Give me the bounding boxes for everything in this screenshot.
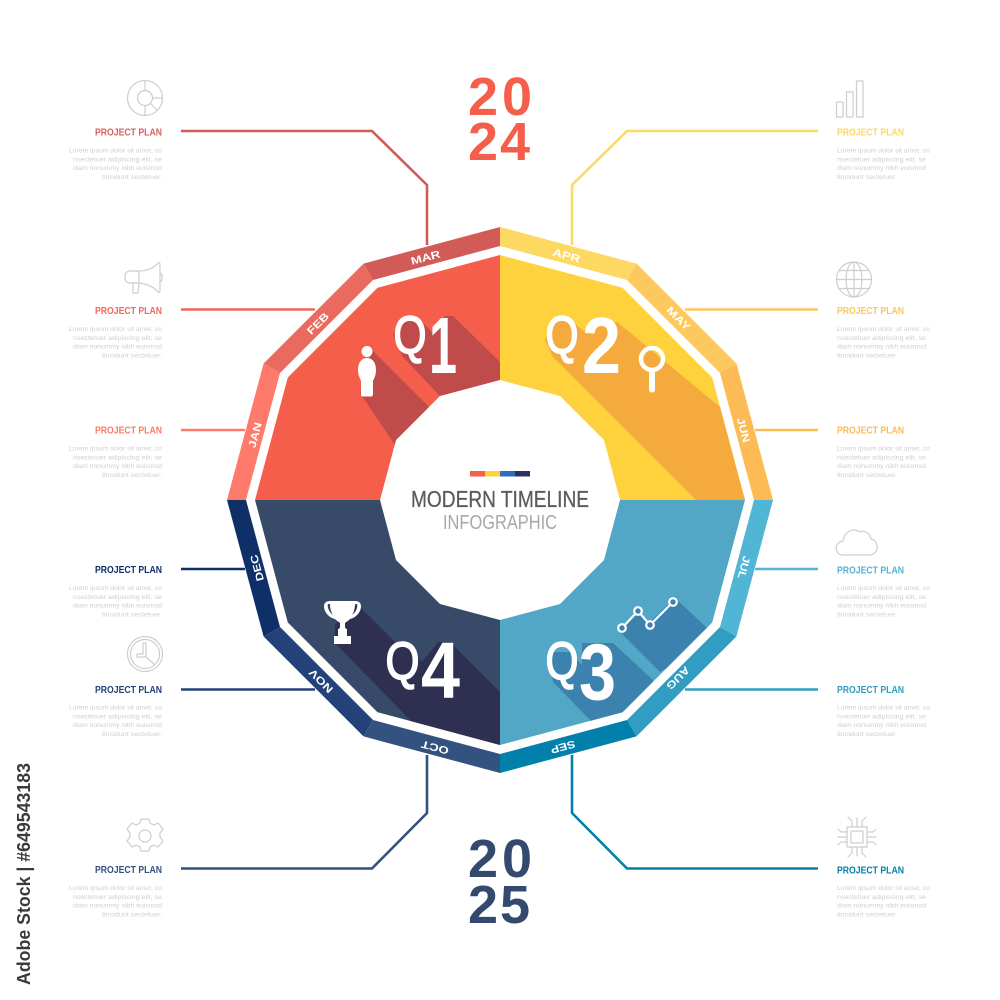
year 2024: 24 (468, 112, 530, 172)
label: December project plan: tincidunt sectetuer. (102, 612, 162, 618)
panel: Q3 (500, 500, 745, 745)
label: May project plan (837, 305, 930, 360)
connector lines (181, 131, 818, 868)
label: May project plan: PROJECT PLAN (837, 305, 904, 317)
label: August project plan: tincidunt sectetuer. (837, 731, 897, 738)
panel: Q4: Q (386, 632, 420, 691)
year 2025: 20 (468, 829, 532, 889)
month ring: JAN (246, 421, 265, 449)
year 2025: 25 (468, 875, 530, 935)
month ring: FEB (305, 310, 332, 337)
panel: Q2: Q (546, 306, 578, 365)
label: June project plan (837, 425, 930, 479)
label: June project plan: Lorem ipsum dolor sit amet, co (837, 446, 930, 452)
label: June project plan: tincidunt sectetuer. (837, 472, 897, 479)
label: January project plan: Lorem ipsum dolor sit amet, co (69, 446, 162, 452)
label: June project plan: nsectetuer adipiscing elit, se (837, 454, 926, 462)
label: March project plan: diam nonummy nibh euismod (73, 165, 162, 172)
label: April project plan: nsectetuer adipiscing elit, se (837, 156, 926, 164)
month ring: MAY (664, 304, 693, 333)
icon: megaphone (125, 263, 162, 293)
panel: Q1: 1 (429, 301, 457, 390)
label: April project plan: tincidunt sectetuer. (837, 174, 897, 181)
panel: Q3: 3 (579, 628, 616, 716)
center title (411, 471, 589, 534)
label: February project plan: PROJECT PLAN (95, 305, 162, 317)
label: July project plan: Lorem ipsum dolor sit amet, co (837, 585, 930, 592)
label: January project plan (69, 425, 162, 479)
panel: Q2 (500, 255, 760, 500)
icon: gear (127, 819, 163, 851)
label: May project plan: nsectetuer adipiscing elit, se (837, 335, 926, 342)
label: March project plan (69, 127, 162, 181)
icon: line chart (618, 598, 677, 632)
label: February project plan: Lorem ipsum dolor sit amet, co (69, 326, 162, 333)
icon: cloud (836, 530, 877, 555)
label: December project plan: Lorem ipsum dolor sit amet, co (69, 585, 162, 592)
label: December project plan: nsectetuer adipiscing elit, se (73, 594, 162, 601)
label: September project plan (837, 864, 930, 918)
label: March project plan: tincidunt sectetuer. (102, 174, 162, 181)
label: March project plan: Lorem ipsum dolor sit amet, co (69, 148, 162, 154)
label: July project plan: PROJECT PLAN (837, 564, 904, 576)
label: August project plan: nsectetuer adipiscing elit, se (837, 714, 926, 720)
label: October project plan: PROJECT PLAN (95, 864, 162, 876)
label: January project plan: nsectetuer adipiscing elit, se (73, 454, 162, 462)
label: September project plan: diam nonummy nibh euismod (837, 902, 926, 910)
label: April project plan: diam nonummy nibh euismod (837, 165, 926, 172)
panel: Q1 (255, 255, 505, 500)
label: October project plan (69, 864, 162, 918)
month ring (227, 227, 773, 773)
label: December project plan: diam nonummy nibh euismod (73, 602, 162, 610)
label: August project plan: PROJECT PLAN (837, 684, 904, 696)
label: July project plan: diam nonummy nibh euismod (837, 602, 926, 610)
label: October project plan: nsectetuer adipiscing elit, se (73, 894, 162, 901)
label: November project plan: Lorem ipsum dolor sit amet, co (69, 704, 162, 712)
icon: clock (128, 636, 162, 672)
label: August project plan (837, 684, 930, 738)
label: September project plan: PROJECT PLAN (837, 864, 904, 876)
label: August project plan: diam nonummy nibh euismod (837, 722, 926, 729)
label: September project plan: nsectetuer adipiscing elit, se (837, 894, 926, 901)
label: February project plan: diam nonummy nibh euismod (73, 344, 162, 350)
month ring: DEC (248, 553, 267, 582)
label: October project plan: Lorem ipsum dolor sit amet, co (69, 885, 162, 892)
label: October project plan: diam nonummy nibh euismod (73, 902, 162, 910)
month ring: JUL (734, 555, 752, 581)
label: August project plan: Lorem ipsum dolor sit amet, co (837, 704, 930, 712)
label: November project plan: nsectetuer adipiscing elit, se (73, 714, 162, 720)
year 2024: 20 (468, 67, 532, 127)
label: May project plan: Lorem ipsum dolor sit amet, co (837, 326, 930, 333)
label: November project plan: PROJECT PLAN (95, 684, 162, 696)
label: September project plan: Lorem ipsum dolor sit amet, co (837, 885, 930, 892)
label: February project plan: nsectetuer adipiscing elit, se (73, 335, 162, 342)
icon: microchip (838, 817, 876, 857)
label: February project plan: tincidunt sectetuer. (102, 352, 162, 360)
panel: Q4: 4 (421, 626, 460, 714)
label: January project plan: PROJECT PLAN (95, 425, 162, 437)
month ring: MAR (410, 248, 442, 268)
month ring: APR (551, 247, 582, 266)
label: April project plan (837, 127, 930, 181)
icon: donut chart (128, 80, 162, 116)
label: July project plan: nsectetuer adipiscing elit, se (837, 594, 926, 601)
label: April project plan: Lorem ipsum dolor sit amet, co (837, 148, 930, 154)
label: April project plan: PROJECT PLAN (837, 127, 904, 139)
label: December project plan (69, 564, 162, 618)
month ring: JUN (734, 417, 752, 444)
label: November project plan: tincidunt sectetuer. (102, 731, 162, 738)
month ring: AUG (663, 663, 692, 692)
month ring: NOV (307, 666, 336, 695)
year 2025 (468, 829, 532, 935)
year 2024 (468, 67, 532, 172)
panel: Q2: 2 (582, 301, 621, 390)
panel: Q3: Q (546, 632, 578, 691)
label: July project plan: tincidunt sectetuer. (837, 612, 897, 618)
credit line: Adobe Stock | #649543183 (14, 763, 34, 985)
label: February project plan (69, 305, 162, 360)
month ring: SEP (549, 737, 576, 755)
label: October project plan: tincidunt sectetuer. (102, 912, 162, 918)
label: January project plan: tincidunt sectetuer. (102, 472, 162, 479)
label: March project plan: PROJECT PLAN (95, 127, 162, 139)
panel: Q4 (255, 500, 510, 760)
label: December project plan: PROJECT PLAN (95, 564, 162, 576)
panel: Q1: Q (394, 306, 426, 365)
icon: trophy (324, 601, 361, 644)
label: March project plan: nsectetuer adipiscing elit, se (73, 156, 162, 164)
label: May project plan: diam nonummy nibh euismod (837, 344, 926, 350)
label: July project plan (837, 564, 930, 618)
center title: MODERN TIMELINE (411, 486, 589, 512)
icon: magnifier (641, 348, 663, 392)
center title: INFOGRAPHIC (443, 512, 557, 534)
label: June project plan: diam nonummy nibh euismod (837, 463, 926, 470)
label: November project plan: diam nonummy nibh euismod (73, 722, 162, 729)
label: June project plan: PROJECT PLAN (837, 425, 904, 437)
label: January project plan: diam nonummy nibh euismod (73, 463, 162, 470)
label: May project plan: tincidunt sectetuer. (837, 352, 897, 360)
label: September project plan: tincidunt sectetuer. (837, 912, 897, 918)
month ring: OCT (419, 737, 450, 756)
icon: person (358, 346, 376, 396)
icon: bar chart (836, 81, 863, 117)
label: November project plan (69, 684, 162, 738)
icon: globe (836, 262, 872, 297)
